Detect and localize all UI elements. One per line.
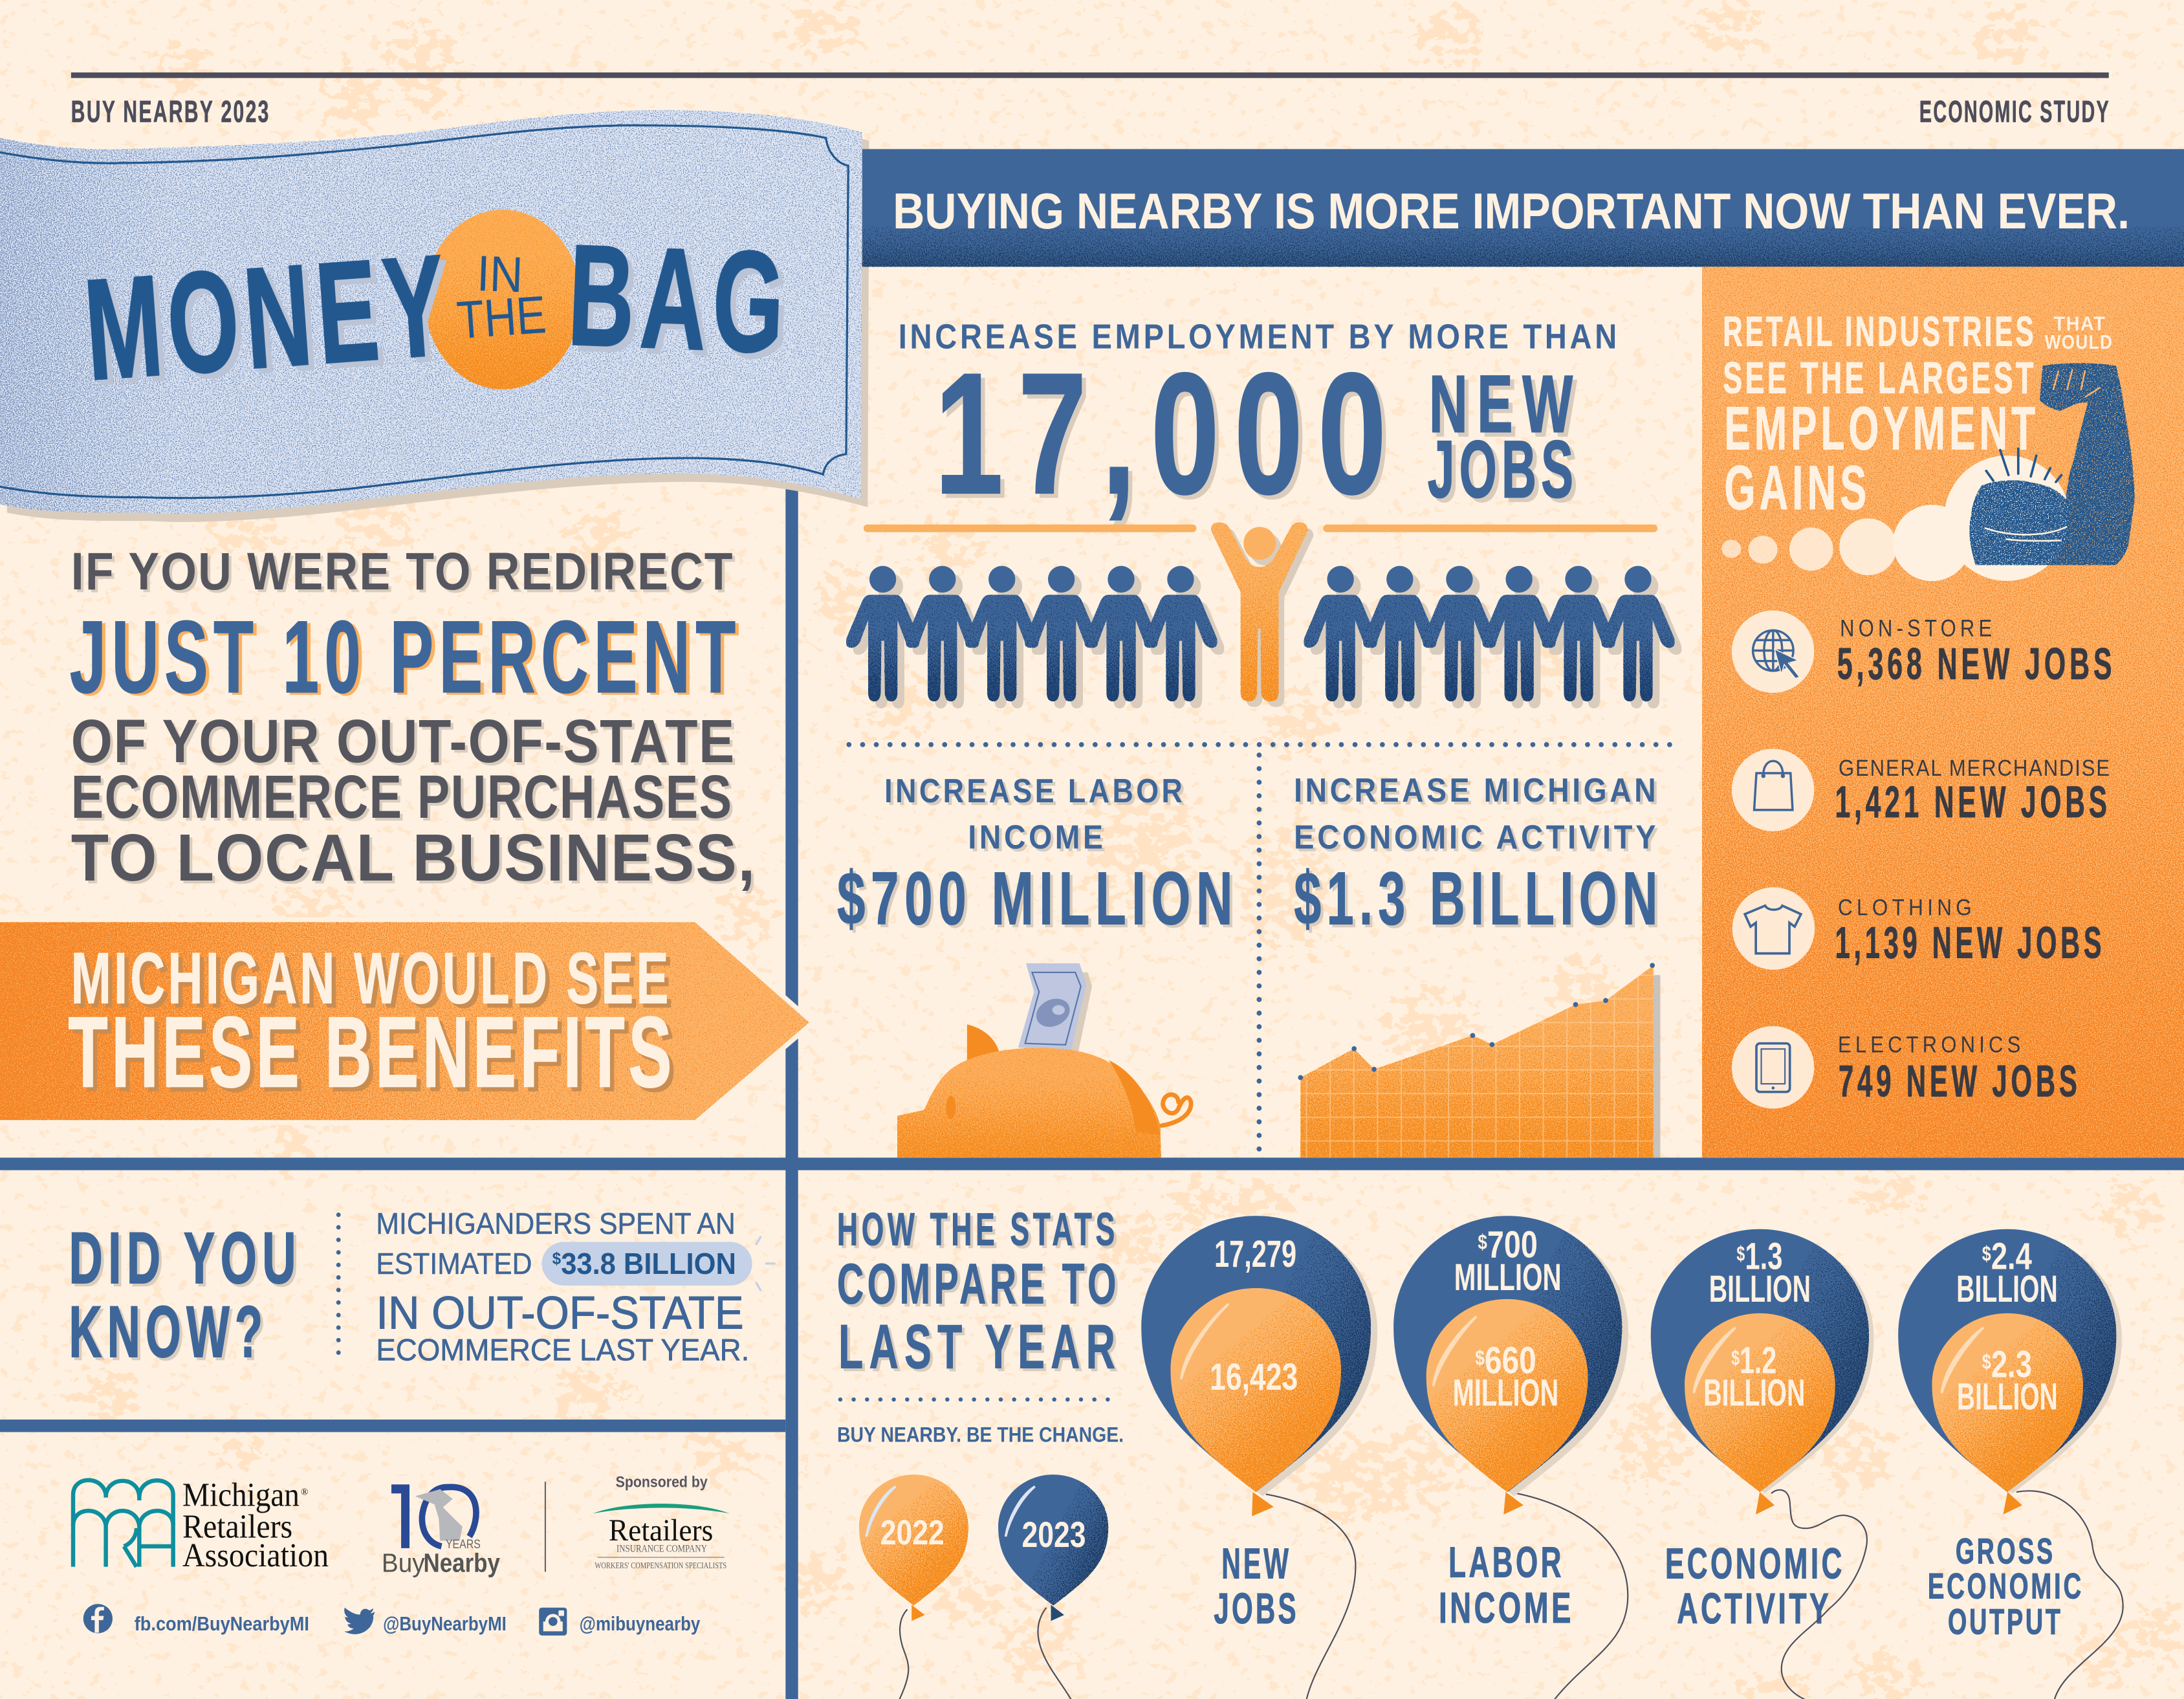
label	[1928, 1530, 2084, 1641]
label	[1439, 1539, 1574, 1632]
label: ECONOMIC	[1665, 1540, 1845, 1588]
logo: Buy Nearby 10 years	[382, 1484, 500, 1577]
label line 2: ECONOMIC ACTIVITY	[1294, 818, 1659, 855]
item: general merchandise	[1732, 749, 2111, 831]
how the stats compare heading	[837, 1204, 1121, 1381]
label: GROSS	[1956, 1530, 2055, 1571]
value 2023: $	[1736, 1242, 1745, 1266]
label: CLOTHING	[1838, 895, 1976, 921]
title word: the: THE	[455, 285, 548, 350]
orange circle	[425, 210, 581, 389]
new jobs label: JOBS	[1428, 425, 1578, 515]
wordmark: ®	[301, 1487, 309, 1497]
value 2023: MILLION	[1454, 1256, 1562, 1299]
dotted dividers	[849, 745, 1670, 1151]
value 2023: $	[1982, 1242, 1991, 1266]
people row right	[1304, 566, 1681, 708]
did you know heading: DID YOU	[69, 1218, 301, 1299]
dollar bill	[1018, 963, 1092, 1053]
callout: 33.8 billion pill: $	[552, 1250, 561, 1268]
label: NON-STORE	[1840, 615, 1996, 641]
value 2022: 2.3	[1991, 1344, 2032, 1386]
new jobs label	[1428, 359, 1582, 515]
value 2023: $	[1478, 1231, 1487, 1254]
how the stats compare heading: HOW THE STATS	[837, 1204, 1119, 1255]
icon: t-shirt	[1732, 887, 1815, 970]
title word: in: IN	[476, 246, 524, 303]
people row left	[846, 566, 1224, 708]
balloon comparison: economic activity	[1651, 1229, 1874, 1699]
line: in out-of-state: IN OUT-OF-STATE	[376, 1288, 744, 1339]
how the stats compare heading: COMPARE TO	[837, 1251, 1120, 1316]
icon: instagram	[539, 1608, 567, 1636]
label	[1665, 1540, 1845, 1633]
icon: twitter bird	[344, 1608, 375, 1634]
value 2022: 660	[1485, 1339, 1536, 1381]
social: instagram: @mibuynearby	[580, 1614, 701, 1635]
arrow: Michigan would see these benefits	[0, 922, 809, 1120]
tagline: BUY NEARBY. BE THE CHANGE.	[837, 1423, 1124, 1447]
label: OUTPUT	[1948, 1601, 2063, 1641]
accent bars	[864, 525, 1657, 532]
big number 17,000: 17,000	[935, 336, 1401, 530]
mark	[73, 1480, 173, 1567]
label line 2: INCOME	[968, 818, 1106, 855]
panel: retail industries	[1702, 267, 2184, 1157]
vertical divider	[785, 474, 798, 1699]
label: NEW	[1221, 1540, 1291, 1588]
new jobs label: NEW	[1429, 359, 1582, 449]
value: $1.3 BILLION	[1294, 857, 1663, 941]
icon: globe with cursor	[1732, 611, 1814, 693]
line: ecommerce last year: ECOMMERCE LAST YEAR.	[376, 1333, 749, 1368]
did you know heading	[69, 1218, 301, 1372]
economic activity stat	[1294, 771, 1663, 941]
label: ECONOMIC	[1928, 1566, 2084, 1606]
value 2022: BILLION	[1703, 1372, 1805, 1414]
string	[2016, 1491, 2123, 1699]
arrow text line 1: MICHIGAN WOULD SEE	[71, 937, 672, 1018]
item: clothing	[1732, 887, 2105, 970]
value 2023	[1709, 1236, 1811, 1310]
callout: 33.8 billion pill	[542, 1237, 774, 1290]
label: ACTIVITY	[1677, 1585, 1831, 1633]
logo: Buy Nearby 10 years: YEARS	[446, 1537, 481, 1551]
icon: flexed arm	[1969, 363, 2135, 565]
sponsor divider	[545, 1482, 546, 1572]
label: JOBS	[1214, 1585, 1299, 1633]
icon: facebook	[83, 1604, 113, 1633]
horizontal divider left column	[0, 1419, 785, 1432]
value 2023	[1454, 1223, 1562, 1299]
how the stats compare heading: LAST YEAR	[838, 1311, 1121, 1381]
panel heading: THAT	[2053, 314, 2106, 335]
callout: 33.8 billion pill: 33.8 BILLION	[561, 1247, 736, 1280]
value 2022: $	[1475, 1346, 1485, 1369]
line: if you were to redirect: IF YOU WERE TO REDIRECT	[71, 542, 734, 601]
value 2023: 2.4	[1991, 1236, 2032, 1278]
string	[1514, 1493, 1628, 1699]
value 2023	[1956, 1236, 2058, 1310]
line: to local business: TO LOCAL BUSINESS,	[71, 820, 756, 895]
string	[1771, 1490, 1867, 1699]
wordmark: Retailers	[182, 1509, 292, 1546]
value 2022	[1453, 1339, 1558, 1414]
wordmark	[182, 1477, 329, 1574]
social: facebook	[83, 1604, 309, 1635]
labor income stat	[837, 772, 1238, 941]
person: orange cheering figure	[1211, 522, 1313, 707]
value 2023: 17,279	[1214, 1233, 1296, 1275]
value 2022	[1703, 1339, 1805, 1414]
dotted rule	[840, 1399, 1111, 1401]
value 2023: 1.3	[1745, 1236, 1782, 1278]
value 2023: 700	[1487, 1223, 1538, 1266]
item: non-store	[1732, 611, 2115, 693]
value 2022: MILLION	[1453, 1372, 1558, 1414]
label: ELECTRONICS	[1838, 1032, 2024, 1058]
line: of your out-of-state: OF YOUR OUT-OF-STATE	[71, 707, 736, 776]
icon: tablet	[1732, 1026, 1814, 1108]
value 2023: BILLION	[1956, 1268, 2058, 1310]
balloon comparison: labor income	[1393, 1216, 1628, 1699]
value 2022: BILLION	[1957, 1376, 2058, 1418]
line: ecommerce purchases: ECOMMERCE PURCHASES	[71, 763, 733, 831]
value 2022: $	[1731, 1346, 1740, 1369]
string	[1266, 1494, 1355, 1699]
arrow text line 2: THESE BENEFITS	[68, 996, 675, 1108]
social: facebook: fb.com/BuyNearbyMI	[135, 1614, 309, 1635]
wordmark: Association	[182, 1537, 329, 1574]
title word: bag: BAG	[565, 214, 793, 383]
panel heading	[1723, 308, 2113, 523]
social: twitter	[344, 1608, 507, 1635]
line: just 10 percent: JUST 10 PERCENT	[70, 599, 741, 714]
line: estimated: ESTIMATED	[376, 1247, 532, 1280]
title word: money: MONEY	[80, 224, 457, 410]
label: LABOR	[1448, 1539, 1564, 1586]
logo: Retailers Insurance Company sponsor: INSURANCE COMPANY	[617, 1544, 707, 1555]
icon: shopping bag	[1732, 749, 1814, 831]
line: michiganders spent an: MICHIGANDERS SPENT AN	[376, 1207, 736, 1240]
horizontal divider full width	[0, 1157, 2184, 1170]
label line 1: INCREASE MICHIGAN	[1294, 771, 1659, 809]
social: twitter: @BuyNearbyMI	[383, 1614, 507, 1635]
dotted vertical divider	[338, 1215, 340, 1357]
panel heading: GAINS	[1724, 452, 1871, 523]
logo: Retailers Insurance Company sponsor	[593, 1474, 730, 1571]
value: $700 MILLION	[837, 857, 1238, 941]
did you know heading: KNOW?	[69, 1291, 268, 1372]
label: INCOME	[1439, 1584, 1574, 1632]
left intro copy	[70, 542, 756, 895]
employment heading: INCREASE EMPLOYMENT BY MORE THAN	[899, 317, 1620, 356]
balloon legend: 2023: 2023	[1021, 1514, 1086, 1555]
logo: Retailers Insurance Company sponsor: Sponsored by	[616, 1474, 708, 1491]
logo: Retailers Insurance Company sponsor: WORKERS' COMPENSATION SPECIALISTS	[595, 1561, 726, 1571]
label: GENERAL MERCHANDISE	[1839, 755, 2111, 781]
balloon legend: 2023	[998, 1474, 1108, 1699]
wordmark: Michigan	[182, 1477, 300, 1514]
value 2022	[1957, 1344, 2058, 1418]
chart: rising area	[1295, 961, 1660, 1157]
value 2022: $	[1982, 1350, 1991, 1374]
panel heading: WOULD	[2045, 332, 2113, 353]
value 2023: BILLION	[1709, 1268, 1811, 1310]
balloon comparison: new jobs	[1141, 1216, 1377, 1699]
logo: Retailers Insurance Company sponsor: Retailers	[609, 1514, 713, 1548]
logo: Buy Nearby 10 years: Buy	[382, 1548, 425, 1577]
logo: Michigan Retailers Association	[73, 1477, 329, 1574]
label	[1214, 1540, 1299, 1633]
trail of cream puffs	[1721, 455, 2069, 581]
headline banner	[862, 149, 2184, 267]
value 2022: 1.2	[1740, 1339, 1776, 1381]
balloon comparison: gross economic output	[1898, 1229, 2123, 1699]
did you know copy	[376, 1207, 774, 1368]
social: instagram	[539, 1608, 701, 1636]
label line 1: INCREASE LABOR	[884, 772, 1185, 809]
balloon legend: 2022: 2022	[880, 1513, 945, 1552]
balloon legend: 2022	[859, 1474, 968, 1699]
item: electronics	[1732, 1026, 2081, 1108]
top rule	[71, 72, 2109, 78]
flag: money in the bag title	[0, 110, 869, 522]
value 2022: 16,423	[1210, 1356, 1298, 1398]
icon: piggy bank with dollar bill	[897, 963, 1191, 1157]
header left: Buy Nearby 2023: BUY NEARBY 2023	[71, 94, 270, 129]
logo: Buy Nearby 10 years: Nearby	[424, 1548, 500, 1577]
